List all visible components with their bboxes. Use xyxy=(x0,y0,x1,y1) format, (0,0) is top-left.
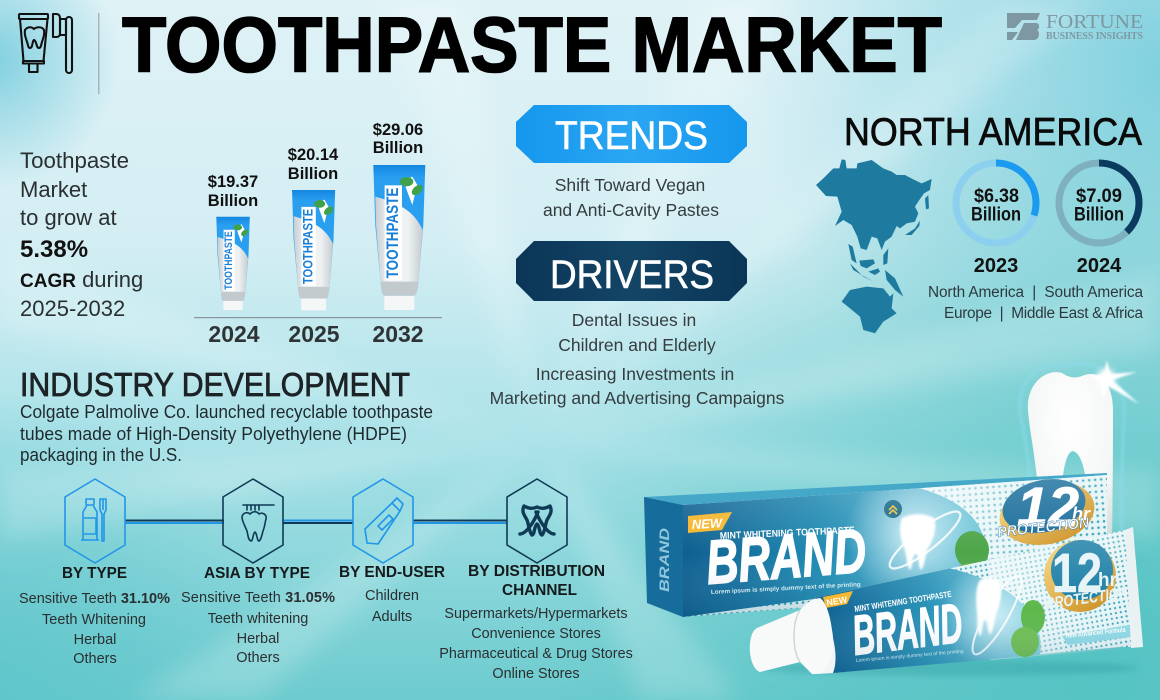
segment: by type: Herbal xyxy=(74,632,116,648)
text: drivers: Dental Issues in xyxy=(572,310,696,330)
illustration: toothpaste box xyxy=(644,472,1107,617)
segment: by end-user xyxy=(339,564,445,625)
illustration: toothpaste tube: MINT WHITENING TOOTHPASTE xyxy=(854,589,952,614)
bar chart: tubes by year: Billion xyxy=(208,192,258,210)
tube cap xyxy=(750,598,836,674)
segment: by type: Sensitive Teeth 31.10% xyxy=(19,591,170,607)
text: regions xyxy=(928,284,1143,322)
segment: by distribution channel: Supermarkets/Hypermarkets xyxy=(444,606,628,622)
tube 2032: TOOTHPASTE xyxy=(383,188,402,278)
segment: asia by type xyxy=(181,565,335,666)
segment: by type: Teeth Whitening xyxy=(42,612,146,628)
donut: 2024: $7.09 xyxy=(1076,186,1122,207)
text: market growth: Market xyxy=(20,177,87,202)
tube 2025: TOOTHPASTE xyxy=(299,209,315,284)
segment: by type: BY TYPE xyxy=(62,565,127,582)
map: region xyxy=(816,159,932,333)
tube 2024: TOOTHPASTE xyxy=(223,231,235,290)
badge: drivers: DRIVERS xyxy=(550,253,714,297)
segment: asia by type: Others xyxy=(236,650,280,666)
bar chart: tubes by year: Billion xyxy=(288,165,338,183)
segment: by type xyxy=(19,565,170,667)
text: market growth: to grow at xyxy=(20,205,117,230)
illustration: toothpaste box: MINT WHITENING TOOTHPASTE xyxy=(720,525,856,542)
title: TOOTHPASTE MARKET xyxy=(122,0,942,88)
donut: 2024: Billion xyxy=(1074,204,1124,226)
segment: by end-user: Children xyxy=(365,588,419,604)
text: trends: and Anti-Cavity Pastes xyxy=(543,200,719,220)
segment: asia by type: Teeth whitening xyxy=(208,611,308,627)
illustration: toothpaste tube: NEW xyxy=(826,594,849,608)
text: regions: North America | South America xyxy=(928,284,1143,301)
segment: by distribution channel: CHANNEL xyxy=(502,582,577,599)
heading: industry development: INDUSTRY DEVELOPMENT xyxy=(20,366,410,403)
text: trends xyxy=(543,175,719,220)
text: trends: Shift Toward Vegan xyxy=(555,175,705,195)
logo: Fortune Business Insights: FORTUNE xyxy=(1046,12,1143,33)
text: industry development: tubes made of High-Density Polyethylene (HDPE) xyxy=(20,424,407,444)
segment: asia by type: Herbal xyxy=(237,631,279,647)
donut: 2023: Billion xyxy=(971,204,1021,226)
illustration: tooth xyxy=(1020,360,1139,540)
illustration: toothpaste tube: BRAND xyxy=(849,591,966,667)
segment: by type: Others xyxy=(73,651,117,667)
donut: 2023: $6.38 xyxy=(974,186,1019,207)
icon: toothpaste and brush xyxy=(19,14,72,73)
illustration: toothpaste tube: 12 xyxy=(1052,541,1102,604)
text: drivers xyxy=(490,310,785,408)
heading: north america: NORTH AMERICA xyxy=(844,111,1142,154)
divider xyxy=(98,13,100,94)
bar chart: tubes by year xyxy=(194,121,442,347)
icon: by distribution channel xyxy=(507,479,567,563)
bar chart: tubes by year: $19.37 xyxy=(208,173,258,191)
tube 2025 xyxy=(292,190,335,310)
tube 2032 xyxy=(373,165,425,310)
logo: Fortune Business Insights: BUSINESS INSIGHTS xyxy=(1046,31,1143,42)
illustration: toothpaste tube: hr xyxy=(1098,570,1118,591)
donut: 2024: 2024 xyxy=(1077,255,1122,277)
logo: Fortune Business Insights xyxy=(1007,12,1143,42)
illustration: toothpaste tube: Lorem ipsum is simply dummy text of the printing xyxy=(856,649,964,664)
illustration: toothpaste box: BRAND xyxy=(704,517,869,598)
illustration: toothpaste tube: New Advanced Formula xyxy=(1065,627,1126,640)
segment: by distribution channel: Pharmaceutical & Drug Stores xyxy=(439,646,633,662)
segment: by distribution channel: Online Stores xyxy=(492,666,580,682)
segment: by end-user: BY END-USER xyxy=(339,564,445,581)
illustration: toothpaste box: BRAND xyxy=(656,528,672,592)
icon: by end-user xyxy=(353,479,413,563)
text: drivers: Increasing Investments in xyxy=(536,364,734,384)
illustration: toothpaste box: NEW xyxy=(691,515,724,532)
text: market growth: Toothpaste xyxy=(20,148,129,173)
text: industry development: Colgate Palmolive Co. launched recyclable toothpaste xyxy=(20,402,433,422)
illustration: toothpaste box: 12 xyxy=(1017,475,1079,538)
text: market growth: CAGR during xyxy=(20,267,143,292)
text: industry development: packaging in the U.S. xyxy=(20,445,182,465)
bar chart: tubes by year: 2025 xyxy=(288,321,340,347)
segment: by end-user: Adults xyxy=(372,609,412,625)
bar chart: tubes by year: 2024 xyxy=(208,321,260,347)
illustration: toothpaste tube: PROTECTION xyxy=(1045,585,1129,613)
text: market growth: 5.38% xyxy=(20,236,88,263)
segment: by distribution channel xyxy=(439,563,633,682)
icon: asia by type xyxy=(223,479,283,563)
tube 2024 xyxy=(216,217,250,310)
badge: trends: TRENDS xyxy=(555,114,708,158)
badge: drivers xyxy=(516,241,747,301)
illustration: toothpaste box: Lorem ipsum is simply dummy text of the printing xyxy=(711,582,861,596)
illustration: toothpaste box: PROTECTION xyxy=(997,514,1091,541)
icon: by type xyxy=(65,479,125,563)
segment: asia by type: Sensitive Teeth 31.05% xyxy=(181,590,335,606)
sparkle xyxy=(1090,360,1139,404)
text: drivers: Children and Elderly xyxy=(558,335,716,355)
connector lines xyxy=(125,520,507,524)
bar chart: tubes by year: Billion xyxy=(373,139,423,157)
text: market growth: 2025-2032 xyxy=(20,296,125,321)
donut: 2023: 2023 xyxy=(974,255,1018,277)
text: drivers: Marketing and Advertising Campaigns xyxy=(490,388,785,408)
badge: trends xyxy=(516,105,747,163)
donut: 2023 xyxy=(956,163,1036,277)
segment: by distribution channel: BY DISTRIBUTION xyxy=(468,563,605,580)
segment: by distribution channel: Convenience Stores xyxy=(471,626,601,642)
illustration: toothpaste box: hr xyxy=(1072,504,1091,524)
text: regions: Europe | Middle East & Africa xyxy=(944,305,1143,322)
donut: 2024 xyxy=(1059,163,1139,277)
bar chart: tubes by year: $20.14 xyxy=(288,146,339,164)
bar chart: tubes by year: $29.06 xyxy=(373,121,423,139)
text: market growth xyxy=(20,148,143,321)
illustration: toothpaste tube xyxy=(750,527,1143,676)
text: industry development xyxy=(20,402,433,465)
segment: asia by type: ASIA BY TYPE xyxy=(204,565,310,582)
bar chart: tubes by year: 2032 xyxy=(372,321,424,347)
